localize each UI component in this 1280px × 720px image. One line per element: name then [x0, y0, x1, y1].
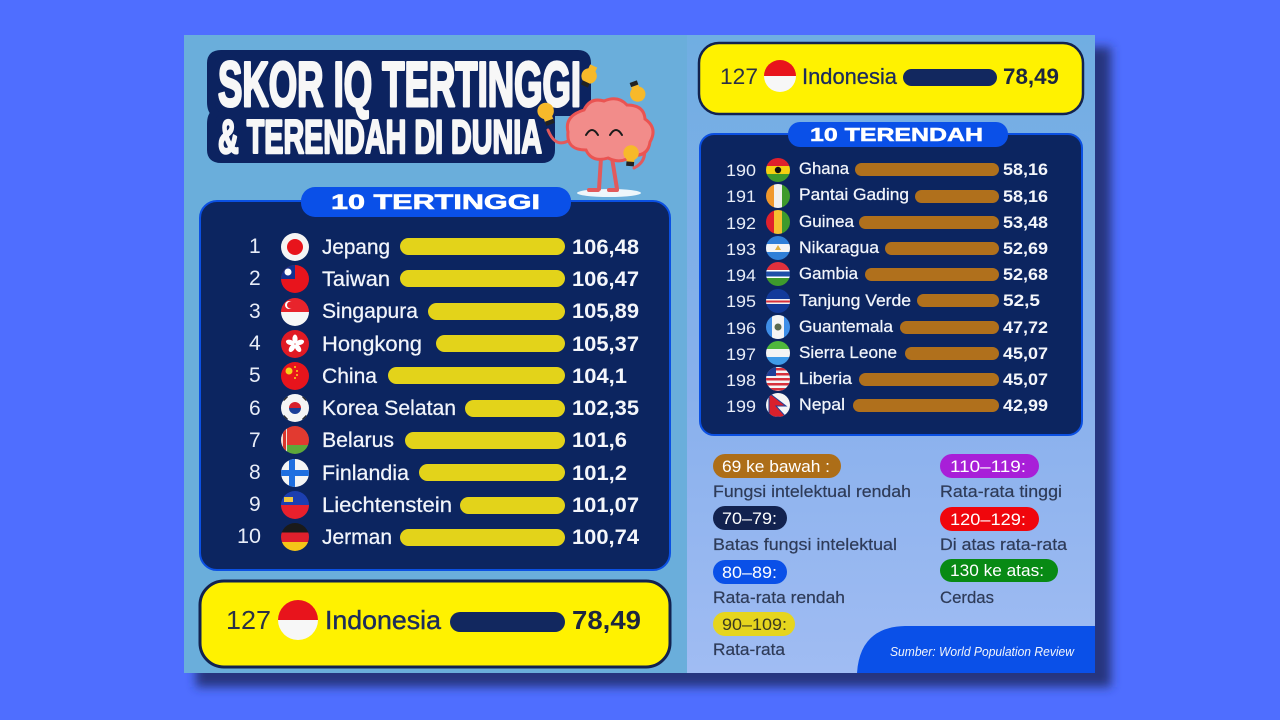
row 9 Liechtenstein: 9 — [249, 493, 261, 516]
source shape — [857, 626, 1095, 673]
row 194 Gambia — [726, 262, 1048, 286]
card shadow — [196, 47, 1111, 687]
row 3 Singapura: Singapura — [322, 300, 418, 323]
bulb 1 — [577, 63, 601, 89]
legend 120-129: Di atas rata-rata — [940, 535, 1068, 554]
row 1 Jepang: 1 — [249, 235, 261, 258]
legs — [589, 158, 617, 190]
legend 90-109: 90–109: — [722, 615, 787, 634]
callout: Indonesia right — [699, 43, 1083, 114]
legend 110-119: Rata-rata tinggi — [940, 482, 1062, 501]
callout box — [200, 581, 670, 667]
bar — [450, 612, 565, 632]
row 196 Guantemala: 47,72 — [1003, 318, 1048, 337]
row 198 Liberia: 45,07 — [1003, 370, 1048, 389]
row 197 Sierra Leone: Sierra Leone — [799, 343, 897, 362]
title line 2: & TERENDAH DI DUNIA — [218, 110, 542, 163]
legend 69 ke bawah: Fungsi intelektual rendah — [713, 482, 911, 501]
title line 1: SKOR IQ TERTINGGI — [218, 50, 581, 120]
legend — [713, 454, 1068, 659]
row 3 Singapura — [249, 298, 639, 326]
row 197 Sierra Leone — [726, 341, 1048, 365]
brain body — [567, 99, 653, 161]
panel box — [700, 134, 1082, 435]
right panel background — [687, 35, 1095, 673]
row 7 Belarus — [249, 426, 627, 454]
row 8 Finlandia: 8 — [249, 461, 261, 484]
row 199 Nepal: 42,99 — [1003, 396, 1048, 415]
legend 120-129: 120–129: — [950, 510, 1026, 529]
name: Indonesia — [325, 605, 442, 635]
legend 130 ke atas — [940, 559, 1058, 607]
source text: Sumber: World Population Review — [890, 644, 1075, 659]
legend 90-109: Rata-rata — [713, 640, 786, 659]
bulb 3 — [535, 100, 558, 127]
row 190 Ghana — [726, 158, 1048, 182]
heading text: 10 TERENDAH — [810, 125, 983, 145]
title backing shape — [211, 54, 587, 159]
bar — [903, 69, 997, 86]
row 196 Guantemala: Guantemala — [799, 317, 894, 336]
row 190 Ghana: 58,16 — [1003, 160, 1048, 179]
row 192 Guinea: 192 — [726, 214, 756, 233]
row 193 Nikaragua — [726, 236, 1048, 260]
row 2 Taiwan: 106,47 — [572, 268, 639, 291]
row 10 Jerman: Jerman — [322, 526, 392, 549]
row 2 Taiwan: Taiwan — [322, 268, 390, 291]
row 196 Guantemala — [726, 315, 1048, 339]
row 191 Pantai Gading: 191 — [726, 187, 756, 206]
row 194 Gambia: 52,68 — [1003, 265, 1048, 284]
row 194 Gambia: Gambia — [799, 264, 859, 283]
row 192 Guinea: Guinea — [799, 212, 855, 231]
row 2 Taiwan — [249, 265, 639, 293]
heading pill — [301, 187, 571, 217]
icon: brain mascot with light bulbs — [535, 63, 653, 197]
flag: Indonesia — [278, 600, 318, 640]
row 190 Ghana: Ghana — [799, 159, 850, 178]
row 6 Korea Selatan: 6 — [249, 397, 261, 420]
legend 69 ke bawah: 69 ke bawah : — [722, 457, 830, 476]
row 4 Hongkong: Hongkong — [322, 333, 422, 356]
legend 80-89 — [713, 560, 845, 607]
legend 80-89: 80–89: — [722, 563, 777, 582]
row 194 Gambia: 194 — [726, 266, 756, 285]
heading pill — [788, 122, 1008, 147]
rank: 127 — [720, 64, 758, 89]
legend 130 ke atas: Cerdas — [940, 588, 994, 607]
source tab — [857, 626, 1095, 673]
panel box — [200, 201, 670, 570]
row 195 Tanjung Verde: 195 — [726, 292, 756, 311]
row 197 Sierra Leone: 197 — [726, 345, 756, 364]
row 192 Guinea: 53,48 — [1003, 213, 1048, 232]
legend 80-89: Rata-rata rendah — [713, 588, 845, 607]
row 5 China — [249, 362, 627, 390]
arms — [548, 130, 645, 168]
row 7 Belarus: 101,6 — [572, 429, 627, 452]
row 193 Nikaragua: 193 — [726, 240, 756, 259]
row 4 Hongkong — [249, 330, 639, 358]
row 9 Liechtenstein — [249, 491, 639, 519]
row 8 Finlandia: Finlandia — [322, 462, 409, 485]
value: 78,49 — [572, 605, 641, 635]
row 195 Tanjung Verde — [726, 289, 1040, 313]
row 199 Nepal: 199 — [726, 397, 756, 416]
legend 90-109 — [713, 612, 795, 659]
row 5 China: 104,1 — [572, 365, 627, 388]
row 193 Nikaragua: Nikaragua — [799, 238, 880, 257]
legend 69 ke bawah — [713, 454, 911, 501]
row 3 Singapura: 3 — [249, 300, 261, 323]
row 8 Finlandia — [249, 459, 627, 487]
row 196 Guantemala: 196 — [726, 319, 756, 338]
row 191 Pantai Gading: Pantai Gading — [799, 185, 909, 204]
row 6 Korea Selatan — [249, 394, 639, 422]
heading text: 10 TERTINGGI — [331, 191, 540, 214]
panel: 10 tertinggi — [200, 187, 670, 570]
row 195 Tanjung Verde: 52,5 — [1003, 291, 1040, 310]
row 1 Jepang — [249, 233, 639, 261]
row 199 Nepal — [726, 393, 1048, 417]
row 192 Guinea — [726, 210, 1048, 234]
row 1 Jepang: 106,48 — [572, 236, 639, 259]
row 193 Nikaragua: 52,69 — [1003, 239, 1048, 258]
row 8 Finlandia: 101,2 — [572, 462, 627, 485]
callout box — [699, 43, 1083, 114]
row 10 Jerman: 10 — [237, 525, 261, 548]
legend 110-119 — [940, 454, 1062, 501]
row 2 Taiwan: 2 — [249, 267, 261, 290]
row 10 Jerman — [237, 523, 639, 551]
row 10 Jerman: 100,74 — [572, 526, 639, 549]
row 198 Liberia — [726, 367, 1048, 391]
legend 120-129 — [940, 507, 1068, 554]
row 6 Korea Selatan: Korea Selatan — [322, 397, 456, 420]
row 190 Ghana: 190 — [726, 161, 756, 180]
bulb 4 — [622, 145, 639, 167]
row 4 Hongkong: 4 — [249, 332, 261, 355]
callout: Indonesia left — [200, 581, 670, 667]
row 198 Liberia: Liberia — [799, 369, 853, 388]
row 197 Sierra Leone: 45,07 — [1003, 344, 1048, 363]
legend 70-79: 70–79: — [722, 509, 777, 528]
floor ellipse — [577, 189, 641, 197]
left panel background — [184, 35, 687, 673]
bulb 2 — [626, 79, 648, 104]
row 5 China: 5 — [249, 364, 261, 387]
rank: 127 — [226, 605, 271, 635]
row 7 Belarus: 7 — [249, 429, 261, 452]
row 5 China: China — [322, 365, 377, 388]
smile — [586, 130, 622, 135]
title — [211, 50, 587, 163]
name: Indonesia — [802, 64, 898, 89]
row 7 Belarus: Belarus — [322, 429, 394, 452]
legend 70-79: Batas fungsi intelektual — [713, 535, 897, 554]
row 4 Hongkong: 105,37 — [572, 333, 639, 356]
legend 110-119: 110–119: — [950, 457, 1026, 476]
row 3 Singapura: 105,89 — [572, 300, 639, 323]
row 191 Pantai Gading: 58,16 — [1003, 187, 1048, 206]
row 199 Nepal: Nepal — [799, 395, 845, 414]
legend 70-79 — [713, 506, 897, 554]
row 9 Liechtenstein: 101,07 — [572, 494, 639, 517]
row 191 Pantai Gading — [726, 184, 1048, 208]
flag: Indonesia — [764, 60, 796, 92]
row 198 Liberia: 198 — [726, 371, 756, 390]
row 9 Liechtenstein: Liechtenstein — [322, 494, 452, 517]
row 1 Jepang: Jepang — [322, 236, 390, 259]
row 195 Tanjung Verde: Tanjung Verde — [799, 291, 911, 310]
legend 130 ke atas: 130 ke atas: — [950, 561, 1044, 580]
value: 78,49 — [1003, 64, 1059, 89]
panel: 10 terendah — [700, 122, 1082, 435]
row 6 Korea Selatan: 102,35 — [572, 397, 639, 420]
